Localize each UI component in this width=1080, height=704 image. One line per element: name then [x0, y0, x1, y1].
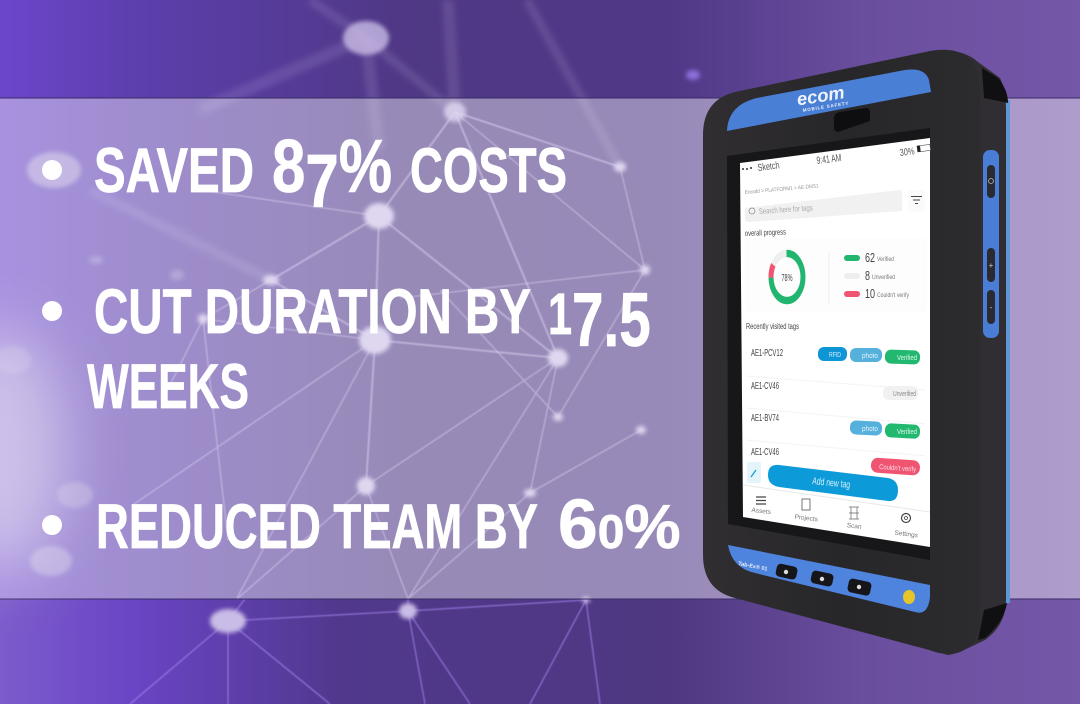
nav: scan: Scan: [846, 522, 862, 531]
breadcrumb: Ereadd > PLATFORM1 > AE-DMS1: [745, 184, 819, 196]
side buttons panel: +: [989, 261, 994, 270]
nav: scan: [846, 507, 862, 531]
tablet screen: [740, 138, 931, 547]
logo: ecom mobile safety: ecom: [795, 82, 846, 109]
network graphic: lines and nodes: [90, 0, 700, 704]
bullet 2: cut duration by 17.5 weeks: 1: [548, 282, 572, 346]
edit button: [747, 462, 761, 483]
legend verified: [844, 250, 894, 265]
nav: settings: [894, 514, 919, 540]
rugged tablet device: [703, 50, 1010, 655]
legend unverified: [844, 268, 895, 283]
legend unverified: 8: [865, 268, 870, 283]
logo: ecom mobile safety: MOBILE SAFETY: [802, 101, 849, 113]
bullet 1: saved 87% costs: COSTS: [410, 136, 567, 206]
bullet 1: saved 87% costs: 7: [305, 141, 339, 224]
bullet 1: saved 87% costs: [42, 126, 567, 224]
nav: assets: Assets: [751, 507, 772, 516]
bullet 1: saved 87% costs: SAVED: [94, 136, 254, 206]
legend unverified: Unverified: [872, 274, 895, 281]
bullet 3: reduced team by 60%: REDUCED TEAM BY: [96, 492, 538, 562]
row: AE1-PCV12: AE1-PCV12: [751, 348, 783, 359]
hardware buttons: [775, 563, 872, 596]
status bar: 9:41 AM: [816, 152, 842, 167]
row: AE1-CV46 could not verify: AE1-CV46: [751, 447, 779, 458]
bullet 2: cut duration by 17.5 weeks: 7.5: [572, 278, 651, 363]
bullet 2: cut duration by 17.5 weeks: CUT DURATION BY: [94, 277, 531, 347]
ex certification mark: [903, 590, 915, 604]
row: AE1-PCV12: [751, 347, 920, 365]
add new tag button: [768, 465, 898, 501]
row: AE1-BV74: [746, 408, 926, 439]
side buttons panel: [983, 150, 999, 338]
row: AE1-CV46 unverified: AE1-CV46: [751, 381, 779, 392]
legend verified: 62: [865, 250, 875, 265]
row: AE1-PCV12: photo: [862, 353, 878, 360]
overall progress heading: overall progress: [745, 228, 786, 238]
bottom navigation: [743, 485, 930, 540]
side blue strip: [1005, 100, 1010, 603]
device side casing: [900, 50, 1008, 654]
row: AE1-BV74: AE1-BV74: [751, 413, 779, 424]
row: AE1-PCV12: RFID: [829, 352, 841, 359]
legend could not verify: Couldn't verify: [877, 292, 910, 299]
recently visited heading: Recently visited tags: [746, 322, 799, 331]
search box: [745, 190, 902, 222]
nav: assets: [751, 497, 772, 516]
bullet 1: saved 87% costs: 8: [272, 126, 305, 209]
bullet 2: cut duration by 17.5 weeks: [42, 277, 651, 422]
filter button: [908, 190, 925, 212]
donut chart 78%: [771, 253, 803, 301]
add new tag button: Add new tag: [812, 476, 851, 491]
donut chart 78%: 78%: [782, 273, 793, 284]
nav: settings: Settings: [894, 530, 919, 540]
row: AE1-CV46 could not verify: [746, 440, 926, 476]
camera housing: [834, 108, 870, 132]
row: AE1-CV46 unverified: [746, 376, 926, 400]
row: AE1-CV46 unverified: Unverified: [893, 391, 916, 398]
search box: Search here for tags: [759, 203, 813, 216]
row: AE1-BV74: Verified: [897, 429, 917, 436]
progress card: [745, 238, 927, 312]
legend verified: Verified: [877, 256, 894, 263]
row: AE1-BV74: photo: [862, 426, 878, 433]
nav: projects: Projects: [794, 514, 819, 524]
bottom blue bar: [728, 545, 930, 613]
side buttons panel: -: [990, 303, 993, 312]
device front face: [703, 50, 980, 655]
top blue bar: [727, 69, 931, 131]
bullet 3: reduced team by 60%: 60%: [558, 485, 681, 563]
status bar: Sketch: [757, 160, 780, 174]
model label: Tab-Ex® 01: [738, 560, 768, 573]
translucent text panel: [0, 98, 1080, 600]
soft bokeh lights: [0, 152, 184, 576]
legend could not verify: 10: [865, 286, 875, 301]
inner screen bezel: [727, 128, 930, 560]
status bar: 30%: [899, 146, 915, 159]
nav: projects: [794, 499, 819, 524]
legend could not verify: [844, 286, 910, 301]
status bar: [742, 144, 931, 174]
row: AE1-PCV12: Verified: [897, 355, 917, 362]
bullet 1: saved 87% costs: %: [339, 126, 392, 209]
bullet 2: cut duration by 17.5 weeks: WEEKS: [87, 352, 249, 422]
row: AE1-CV46 could not verify: Couldn't verify: [879, 464, 917, 474]
